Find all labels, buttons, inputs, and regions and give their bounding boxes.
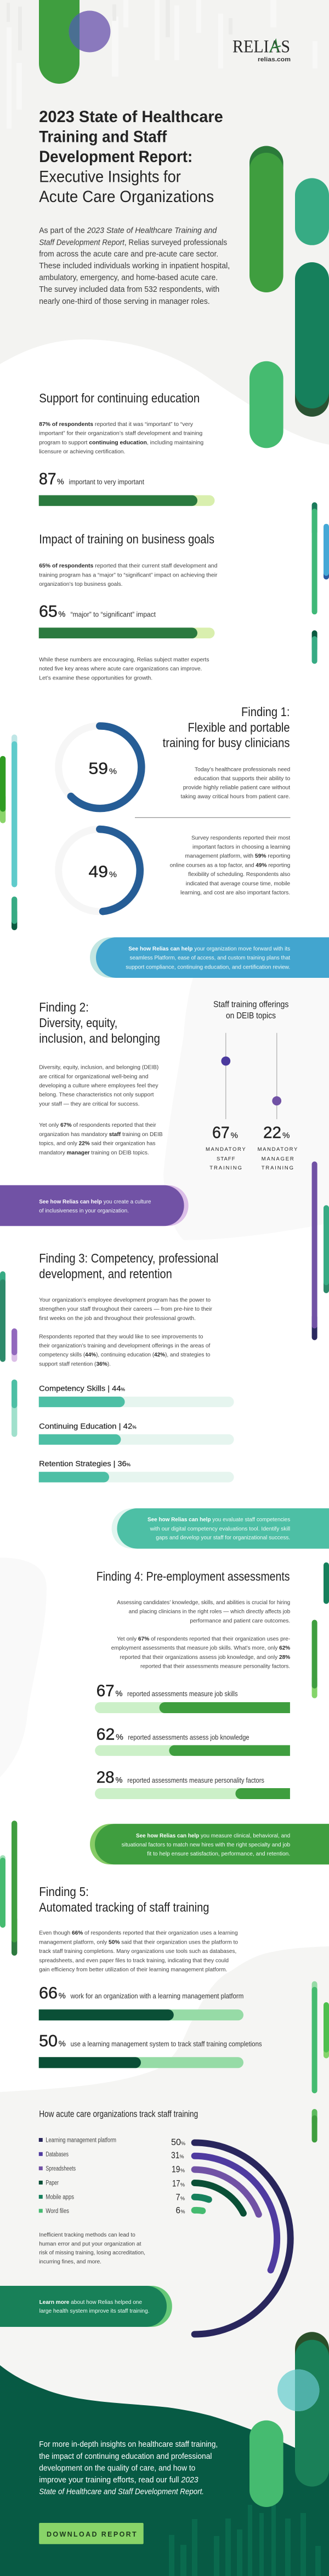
stat: 65 percent: 65 <box>39 602 58 620</box>
callout: dark green: large health system improve its staff training. <box>39 2308 149 2314</box>
panel: finding 2 background <box>163 978 329 1240</box>
body text: training program has a “major” to “significant” impact on achieving their <box>39 572 218 578</box>
chart title: on DEIB topics <box>226 1011 276 1021</box>
body text <box>39 563 218 587</box>
stat and bar: 66 percent: % <box>59 1991 66 2001</box>
stat and bar: job knowledge 62 percent: reported assessments assess job knowledge <box>128 1734 249 1742</box>
stat and bar: 66 percent: work for an organization with a learning management platform <box>70 1992 243 2000</box>
slider: 67 percent <box>206 1033 246 1171</box>
heading <box>163 705 290 750</box>
donut chart: 59 percent: 59 <box>89 759 108 777</box>
heading: Finding 1: <box>241 705 290 719</box>
bar: retention strategies: Retention Strategies | 36 % <box>39 1459 131 1468</box>
callout: blue: seamless Platform, ease of access, and custom training plans that <box>129 955 290 961</box>
body text: Diversity, equity, inclusion, and belonging (DEIB) <box>39 1064 158 1071</box>
heading: training for busy clinicians <box>163 736 290 750</box>
body text: their organization’s training and development offerings in the areas of <box>39 1342 210 1349</box>
body text: need for flexibility: education that supports their ability to <box>194 775 290 782</box>
body text: survey factors <box>170 834 290 896</box>
bar: 87 percent <box>39 495 215 506</box>
title: Development Report: <box>39 148 192 166</box>
stat and bar: 50 percent: % <box>59 2039 66 2048</box>
body text: licensure or achieving certification. <box>39 448 125 455</box>
chart title: Staff training offerings <box>213 1000 289 1010</box>
closing text <box>39 2440 218 2497</box>
body text: support staff retention (36%). <box>39 1361 111 1368</box>
slider: 22 percent: 22 <box>263 1123 281 1142</box>
body text: organization has mandatory staff training on DEIB <box>39 1131 163 1138</box>
body text: incurring fines, and more. <box>39 2258 101 2265</box>
heading: Support for continuing education <box>39 391 200 405</box>
button: download report <box>39 2523 144 2544</box>
intro text <box>39 226 230 306</box>
button: download report: DOWNLOAD REPORT <box>47 2531 137 2538</box>
closing text: Let’s examine these opportunities for growth. <box>39 675 152 681</box>
body text: survey factors: indicated that average course time, mobile <box>186 880 290 887</box>
callout: green: situational factors to match new hires with the right specialty and job <box>122 1841 290 1848</box>
callout: green: fit to help ensure satisfaction, performance, and retention. <box>147 1851 290 1857</box>
slider: 67 percent: TRAINING <box>209 1165 242 1171</box>
body text: first weeks on the job and throughout their professional growth. <box>39 1315 196 1322</box>
callout: dark green <box>0 2286 172 2327</box>
chart: staff training offerings on DEIB topics <box>206 1000 298 1171</box>
stat: 87 percent: % <box>57 477 64 486</box>
body text: human error and put your organization at <box>39 2240 141 2247</box>
body text: Assessing candidates’ knowledge, skills, and abilities is crucial for hiring <box>117 1599 290 1606</box>
body text: need for flexibility <box>181 767 290 800</box>
intro text: ambulatory, emergency, and home-based acute care. <box>39 274 218 283</box>
title: Training and Staff <box>39 128 167 146</box>
panel: finding 1 <box>59 705 329 978</box>
body text: survey factors: Survey respondents reported their most <box>191 834 290 841</box>
heading <box>39 1251 218 1281</box>
stat and bar: 50 percent: 50 <box>39 2032 58 2050</box>
body text: survey factors: important factors in choosing a learning <box>192 844 290 850</box>
legend: Spreadsheets <box>46 2165 76 2172</box>
heading: Finding 2: <box>39 1000 89 1014</box>
radial chart values <box>171 2137 185 2216</box>
icon: side pills right finding 4 <box>312 1563 329 1698</box>
body text: organization’s top business goals. <box>39 581 123 587</box>
body text: Inefficient tracking methods can lead to <box>39 2232 135 2238</box>
radial chart values: % <box>181 2209 185 2215</box>
stat: 65 percent: “major” to “significant” impact <box>71 610 156 618</box>
slider: 67 percent: STAFF <box>217 1156 235 1162</box>
slider: 22 percent: MANDATORY <box>258 1146 298 1152</box>
stat and bar: job knowledge 62 percent: 62 <box>97 1726 115 1744</box>
body text: Respondents reported that they would like to see improvements to <box>39 1334 203 1340</box>
stat and bar: job skills 67 percent: % <box>115 1689 123 1698</box>
heading: Impact of training on business goals <box>39 532 214 546</box>
body text <box>39 2232 145 2265</box>
title: Acute Care Organizations <box>39 188 214 206</box>
radial chart values: % <box>180 2195 185 2201</box>
body text: survey factors: online courses as a top factor, and 49% reporting <box>170 862 290 868</box>
icon: side pills upper right <box>312 502 329 664</box>
callout: teal <box>112 1508 329 1549</box>
closing text: State of Healthcare and Staff Development Report. <box>39 2487 204 2497</box>
heading <box>39 1885 209 1914</box>
body text: survey factors: flexibility of scheduling. Respondents also <box>188 871 290 878</box>
radial chart values: 50 <box>171 2137 181 2147</box>
closing text: improve your training efforts, read our full 2023 <box>39 2475 198 2485</box>
stat and bar: job skills 67 percent <box>95 1682 290 1713</box>
stat and bar: 66 percent <box>39 1984 243 2020</box>
radial chart values: % <box>180 2168 185 2174</box>
dark wave background <box>0 2365 329 2576</box>
stat and bar: job skills 67 percent: 67 <box>97 1682 115 1700</box>
callout: green <box>90 1824 329 1864</box>
callout: purple <box>0 1185 189 1226</box>
callout: teal: gaps and develop your staff for organizational success. <box>156 1535 290 1541</box>
icon: hero right pills <box>249 146 329 448</box>
body text: 87% of respondents reported that it was “important” to “very <box>39 421 194 428</box>
stat: 87 percent: 87 <box>39 470 56 488</box>
chart title <box>213 1000 289 1021</box>
closing text: noted five key areas where acute care organizations can improve. <box>39 666 202 672</box>
heading: Finding 3: Competency, professional <box>39 1251 218 1265</box>
body text: risk of missing training, losing accreditation, <box>39 2249 145 2256</box>
slider: 67 percent: % <box>231 1131 238 1140</box>
slider: 22 percent: TRAINING <box>262 1165 293 1171</box>
heading: Flexible and portable <box>188 721 290 735</box>
body text <box>39 1930 238 1973</box>
bar: competency skills <box>39 1384 234 1407</box>
intro text: from across the acute care and pre-acute care sector. <box>39 250 218 259</box>
callout: blue <box>90 937 329 978</box>
stat and bar: personality factors 28 percent: reported assessments measure personality factors <box>127 1777 264 1784</box>
heading <box>39 1000 160 1045</box>
intro text: These included individuals working in inpatient hospital, <box>39 262 230 270</box>
donut chart: 49 percent: 49 <box>89 863 108 881</box>
icon: green pill and purple circle <box>39 0 111 84</box>
body text: mandatory manager training on DEIB topics. <box>39 1150 149 1156</box>
body text: topics, and only 22% said their organization has <box>39 1140 156 1146</box>
icon: footer pills and circle <box>249 2332 329 2507</box>
radial chart values: 7 <box>175 2192 180 2202</box>
callout: blue: support compliance, continuing education, and certification review. <box>126 964 290 971</box>
logo: RELIAS <box>232 37 290 57</box>
body text: management platform, only 50% said that their organization uses the platform to <box>39 1939 238 1946</box>
intro text: nearly one-third of those serving in manager roles. <box>39 297 210 306</box>
panel: how acute care organizations track staff training <box>0 2109 291 2335</box>
body text <box>111 1599 291 1669</box>
panel: lower grey background <box>0 1946 329 2576</box>
title <box>39 108 223 206</box>
logo: relias.com <box>258 56 291 63</box>
slider: 67 percent: MANDATORY <box>206 1146 246 1152</box>
legend: Learning management platform <box>46 2137 116 2144</box>
heading: Automated tracking of staff training <box>39 1900 209 1914</box>
heading: inclusion, and belonging <box>39 1031 160 1045</box>
stat: 87 percent <box>39 470 144 488</box>
stat and bar: job skills 67 percent: reported assessments measure job skills <box>127 1690 238 1698</box>
body text: 65% of respondents reported that their current staff development and <box>39 563 218 569</box>
body text <box>39 1064 163 1156</box>
bar: competency skills: Competency Skills | 44 % <box>39 1384 125 1393</box>
slider: 22 percent: MANAGER <box>262 1156 294 1162</box>
body text: reported that their organizations assess job knowledge, and only 28% <box>120 1654 291 1661</box>
stat and bar: personality factors 28 percent: % <box>115 1776 123 1785</box>
body text: competency skills (44%), continuing education (42%), and strategies to <box>39 1352 211 1358</box>
stat: 65 percent: % <box>58 609 65 619</box>
body text: Even though 66% of respondents reported that their organization uses a learning <box>39 1930 238 1937</box>
bar: continuing education <box>39 1421 234 1445</box>
slider: 22 percent: % <box>282 1131 290 1140</box>
radial bar chart <box>195 2143 291 2335</box>
callout: purple: of inclusiveness in your organization. <box>39 1208 129 1214</box>
radial chart values: 19 <box>172 2164 180 2175</box>
panel: closing footer <box>0 2332 329 2576</box>
donut chart: 59 percent: % <box>109 767 117 776</box>
panel: finding 3 <box>39 1251 329 1549</box>
hero panel <box>39 0 291 306</box>
closing text: development on the quality of care, and how to <box>39 2463 195 2473</box>
legend <box>39 2137 116 2215</box>
stat and bar: personality factors 28 percent: 28 <box>97 1768 115 1787</box>
panel: finding 4 background <box>0 1558 47 1777</box>
stat and bar: 50 percent: use a learning management system to track staff training completions <box>71 2040 262 2048</box>
legend: Paper <box>46 2180 59 2186</box>
closing text <box>39 656 209 681</box>
icon: side pills left finding 3 <box>0 1271 17 1437</box>
body text: belong. These characteristics not only support <box>39 1092 154 1098</box>
stat and bar: job knowledge 62 percent <box>95 1726 290 1756</box>
intro text: Staff Development Report, Relias surveyed professionals <box>39 238 227 247</box>
body text: employment assessments that measure job skills. What’s more, only 62% <box>111 1645 291 1651</box>
icon: side pills left finding 5 <box>0 1820 17 1956</box>
bar: continuing education: Continuing Education | 42 % <box>39 1421 137 1430</box>
icon: side pills right lower <box>312 1981 329 2142</box>
body text: need for flexibility: provide highly reliable patient care without <box>183 784 290 791</box>
radial chart values: 6 <box>175 2205 180 2216</box>
intro text: As part of the 2023 State of Healthcare Training and <box>39 226 217 235</box>
body text: program to support continuing education, including maintaining <box>39 440 203 446</box>
radial chart values: % <box>181 2141 185 2146</box>
body text <box>39 1297 212 1368</box>
body text <box>39 421 203 455</box>
panel: finding 2 <box>0 1000 298 1226</box>
radial chart values: 17 <box>172 2179 180 2189</box>
stat: 65 percent <box>39 602 156 620</box>
closing text: the impact of continuing education and professional <box>39 2452 212 2461</box>
heading: development, and retention <box>39 1266 172 1281</box>
slider: 22 percent <box>258 1033 298 1171</box>
heading: How acute care organizations track staff training <box>39 2109 198 2119</box>
stat and bar: personality factors 28 percent <box>95 1768 290 1799</box>
callout: teal: See how Relias can help you evaluate staff competencies <box>148 1517 290 1523</box>
body text: Yet only 67% of respondents reported that their organization uses pre- <box>117 1635 291 1642</box>
panel: impact of training on business goals <box>39 532 218 681</box>
panel: support for continuing education <box>39 391 215 506</box>
body text: need for flexibility: Today’s healthcare professionals need <box>195 767 290 773</box>
callout: dark green: Learn more about how Relias helped one <box>39 2299 142 2306</box>
title: 2023 State of Healthcare <box>39 108 223 126</box>
body text: are critical for organizational well-being and <box>39 1074 149 1080</box>
body text: gain efficiency from better utilization of their learning management platform. <box>39 1966 227 1973</box>
stat: 87 percent: important to very important <box>69 478 144 486</box>
body text: strengthen your staff throughout their careers — from pre-hire to their <box>39 1306 212 1312</box>
body text: developing a culture where employees feel they <box>39 1082 158 1089</box>
panel: finding 4 <box>90 1569 329 1864</box>
legend: Mobile apps <box>46 2194 74 2200</box>
bar: 65 percent <box>39 627 214 638</box>
callout: green: See how Relias can help you measure clinical, behavioral, and <box>136 1832 290 1839</box>
heading: Finding 5: <box>39 1885 89 1899</box>
closing text: While these numbers are encouraging, Relias subject matter experts <box>39 656 209 663</box>
callout: blue: See how Relias can help your organization move forward with its <box>128 946 290 952</box>
callout: teal: with our digital competency evaluations tool. Identify skill <box>150 1525 290 1532</box>
bar: retention strategies <box>39 1459 234 1483</box>
heading: Finding 4: Pre-employment assessments <box>97 1569 290 1583</box>
body text: performance and patient care outcomes. <box>190 1617 290 1624</box>
body text: reported that their assessments measure personality factors. <box>140 1663 290 1669</box>
donut chart: 59 percent <box>59 726 141 809</box>
title: Executive Insights for <box>39 168 181 186</box>
legend: Word files <box>46 2208 69 2215</box>
intro text: The survey included data from 532 respondents, with <box>39 285 219 294</box>
heading: Diversity, equity, <box>39 1016 117 1030</box>
icon: side pills right finding 2 <box>312 1161 329 1340</box>
slider: 67 percent: 67 <box>212 1123 230 1142</box>
body text: Your organization’s employee development program has the power to <box>39 1297 211 1304</box>
body text: important” for their organization’s staff development and training <box>39 430 202 437</box>
body text: survey factors: learning, and cost are also important factors. <box>180 889 290 896</box>
radial chart values: % <box>180 2154 184 2159</box>
donut chart: 49 percent: % <box>109 870 117 879</box>
body text: need for flexibility: taking away critical hours from patient care. <box>181 793 290 800</box>
body text: track staff training completions. Many organizations use tools such as databases, <box>39 1948 236 1955</box>
closing text: For more in-depth insights on healthcare staff training, <box>39 2440 218 2449</box>
body text: your staff — they are critical for success. <box>39 1101 139 1108</box>
panel: finding 5 <box>39 1885 262 2068</box>
body text: Yet only 67% of respondents reported that their <box>39 1122 156 1128</box>
stat and bar: 50 percent <box>39 2032 262 2068</box>
body text: spreadsheets, and even paper files to track training, indicating that they could <box>39 1957 229 1964</box>
body text: survey factors: management platform, with 59% reporting <box>185 853 290 860</box>
donut chart: 49 percent <box>59 829 141 912</box>
icon: side pills left finding 1 <box>0 735 17 930</box>
stat and bar: job knowledge 62 percent: % <box>116 1733 123 1742</box>
radial chart values: % <box>180 2182 185 2188</box>
callout: purple: See how Relias can help you create a culture <box>39 1198 151 1205</box>
radial chart values: 31 <box>171 2150 180 2160</box>
stat and bar: 66 percent: 66 <box>39 1984 58 2002</box>
legend: Databases <box>46 2151 69 2158</box>
body text: and placing clinicians in the right roles — which directly affects job <box>129 1608 290 1615</box>
